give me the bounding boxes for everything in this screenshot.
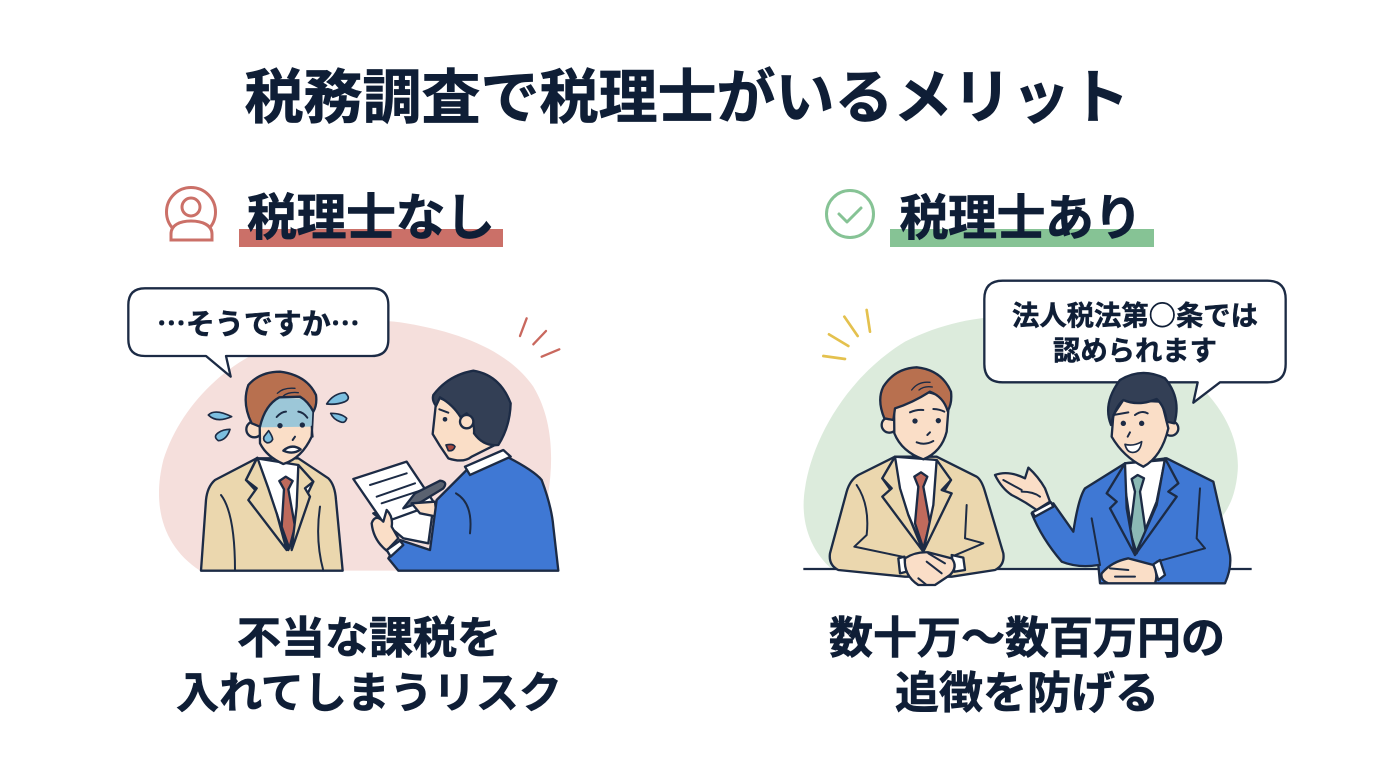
speech bubble: 法人税法第○条では bbox=[1012, 293, 1258, 333]
heading: no accountant: 税理士なし bbox=[247, 178, 495, 250]
illustration: nervous client and inspector bbox=[128, 288, 559, 571]
heading: with accountant: 税理士あり bbox=[900, 179, 1142, 250]
panel: with tax accountant bbox=[803, 179, 1286, 721]
client figure bbox=[830, 367, 1004, 585]
caption: risk bbox=[176, 602, 562, 721]
icon: alert marks red bbox=[520, 318, 559, 357]
illustration: client and accountant at table bbox=[803, 281, 1286, 585]
speech bubble: …そうですか… bbox=[157, 301, 360, 343]
client figure bbox=[201, 372, 343, 571]
accountant figure bbox=[995, 373, 1230, 583]
caption: benefit bbox=[829, 602, 1225, 721]
background blob pink bbox=[159, 321, 557, 571]
speech bubble bbox=[128, 288, 388, 377]
inspector figure bbox=[353, 371, 558, 571]
background blob green bbox=[804, 316, 1238, 569]
icon: check circle bbox=[826, 190, 874, 238]
caption: risk: 不当な課税を bbox=[237, 602, 501, 666]
caption: risk: 入れてしまうリスク bbox=[176, 659, 562, 721]
speech bubble bbox=[984, 281, 1286, 403]
icon: sparkle marks yellow bbox=[823, 310, 870, 359]
icon: sweat drops bbox=[208, 393, 348, 441]
speech bubble: 認められます bbox=[1053, 328, 1217, 368]
panel: without tax accountant bbox=[128, 178, 562, 721]
caption: benefit: 追徴を防げる bbox=[895, 657, 1159, 721]
title: 税務調査で税理士がいるメリット bbox=[244, 50, 1130, 135]
caption: benefit: 数十万〜数百万円の bbox=[829, 602, 1225, 666]
icon: person in circle bbox=[166, 188, 216, 240]
table line bbox=[803, 565, 1252, 572]
